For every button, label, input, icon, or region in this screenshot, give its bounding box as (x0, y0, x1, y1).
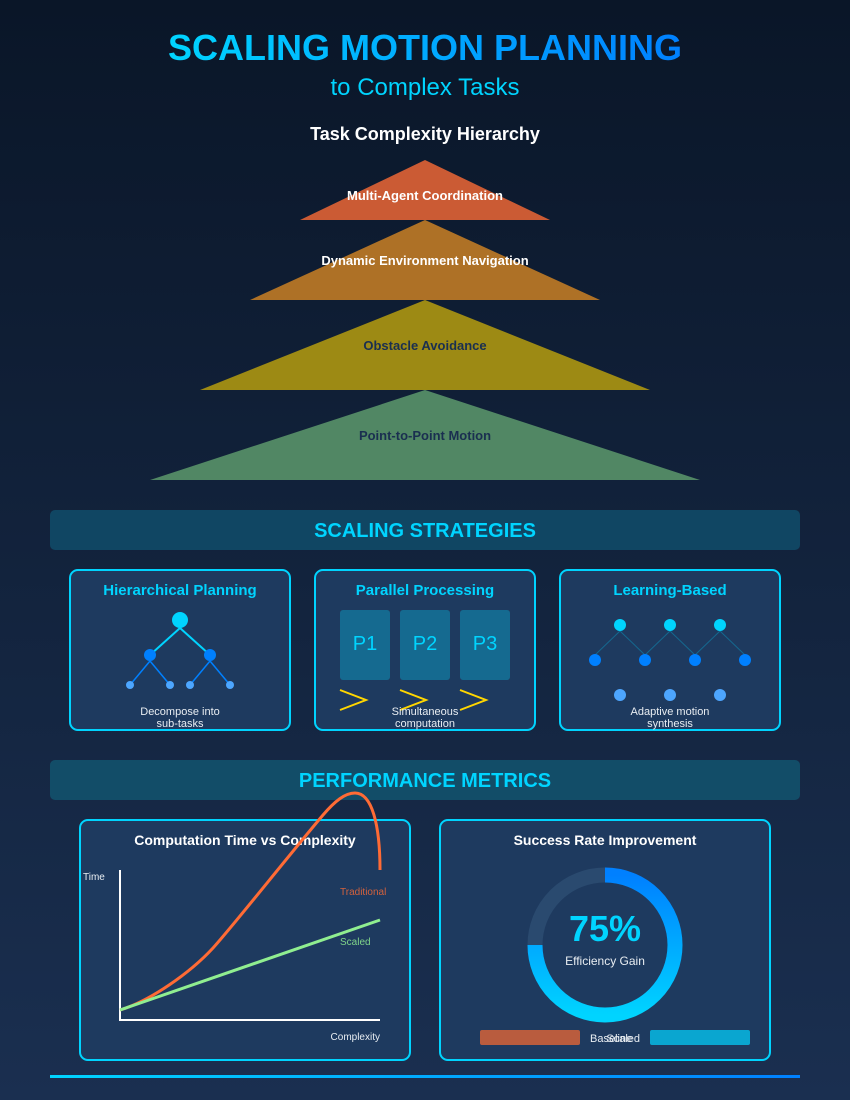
section header: performance metrics (50, 760, 800, 800)
tier: multi-agent coordination: Multi-Agent Coordination (347, 188, 503, 203)
processor blocks: P2 (413, 633, 437, 655)
label: scaled: Scaled (340, 937, 371, 948)
tier: point-to-point motion (150, 390, 700, 480)
panel: computation time chart (80, 793, 410, 1060)
panel: hierarchical planning (70, 570, 290, 730)
legend: baseline (480, 1030, 632, 1045)
axis label: time: Time (83, 872, 105, 883)
heading: task complexity hierarchy: Task Complexity Hierarchy (310, 124, 540, 144)
chart axes (119, 870, 380, 1021)
card description: sub-tasks (156, 718, 204, 730)
tier: multi-agent coordination (300, 160, 550, 220)
stat label: Efficiency Gain (565, 954, 645, 968)
panel heading: Success Rate Improvement (514, 832, 697, 848)
tier: obstacle avoidance (200, 300, 650, 390)
card description: computation (395, 718, 455, 730)
card heading: parallel processing: Parallel Processing (356, 582, 494, 599)
tier: point-to-point motion: Point-to-Point Motion (359, 428, 491, 443)
card description: synthesis (647, 718, 693, 730)
tier: dynamic environment navigation (250, 220, 600, 300)
subtitle: to Complex Tasks (331, 74, 519, 101)
panel: success rate improvement (440, 820, 770, 1060)
section header: scaling strategies (50, 510, 800, 550)
axis label: complexity: Complexity (331, 1032, 380, 1043)
processor blocks: P1 (353, 633, 377, 655)
tier: dynamic environment navigation: Dynamic Environment Navigation (321, 253, 529, 268)
stat: 75%: 75% (569, 908, 641, 949)
card description: Adaptive motion (631, 706, 709, 718)
section header: performance metrics: PERFORMANCE METRICS (299, 770, 551, 792)
line: traditional (120, 793, 380, 1010)
icon: tree diagram (126, 612, 234, 689)
card heading: hierarchical planning: Hierarchical Planning (103, 582, 257, 599)
processor blocks: P3 (473, 633, 497, 655)
card description: Simultaneous (392, 706, 459, 718)
card description: Decompose into (140, 706, 220, 718)
section header: scaling strategies: SCALING STRATEGIES (314, 520, 536, 542)
card heading: learning-based: Learning-Based (613, 582, 727, 599)
legend: baseline: Baseline (590, 1033, 632, 1045)
pyramid chart (150, 160, 700, 480)
panel: parallel processing (315, 570, 535, 730)
icon: neural network (589, 619, 751, 701)
title: SCALING MOTION PLANNING (168, 27, 682, 68)
processor blocks (340, 610, 510, 680)
label: traditional: Traditional (340, 887, 386, 898)
legend: scaled (606, 1030, 750, 1045)
line: scaled (120, 920, 380, 1010)
tier: obstacle avoidance: Obstacle Avoidance (363, 338, 487, 353)
panel: learning-based (560, 570, 780, 730)
arrows: parallel chevrons (340, 690, 486, 710)
donut chart: 75% (535, 875, 675, 1015)
chart heading: Computation Time vs Complexity (134, 832, 356, 848)
legend: scaled: Scaled (606, 1033, 640, 1045)
